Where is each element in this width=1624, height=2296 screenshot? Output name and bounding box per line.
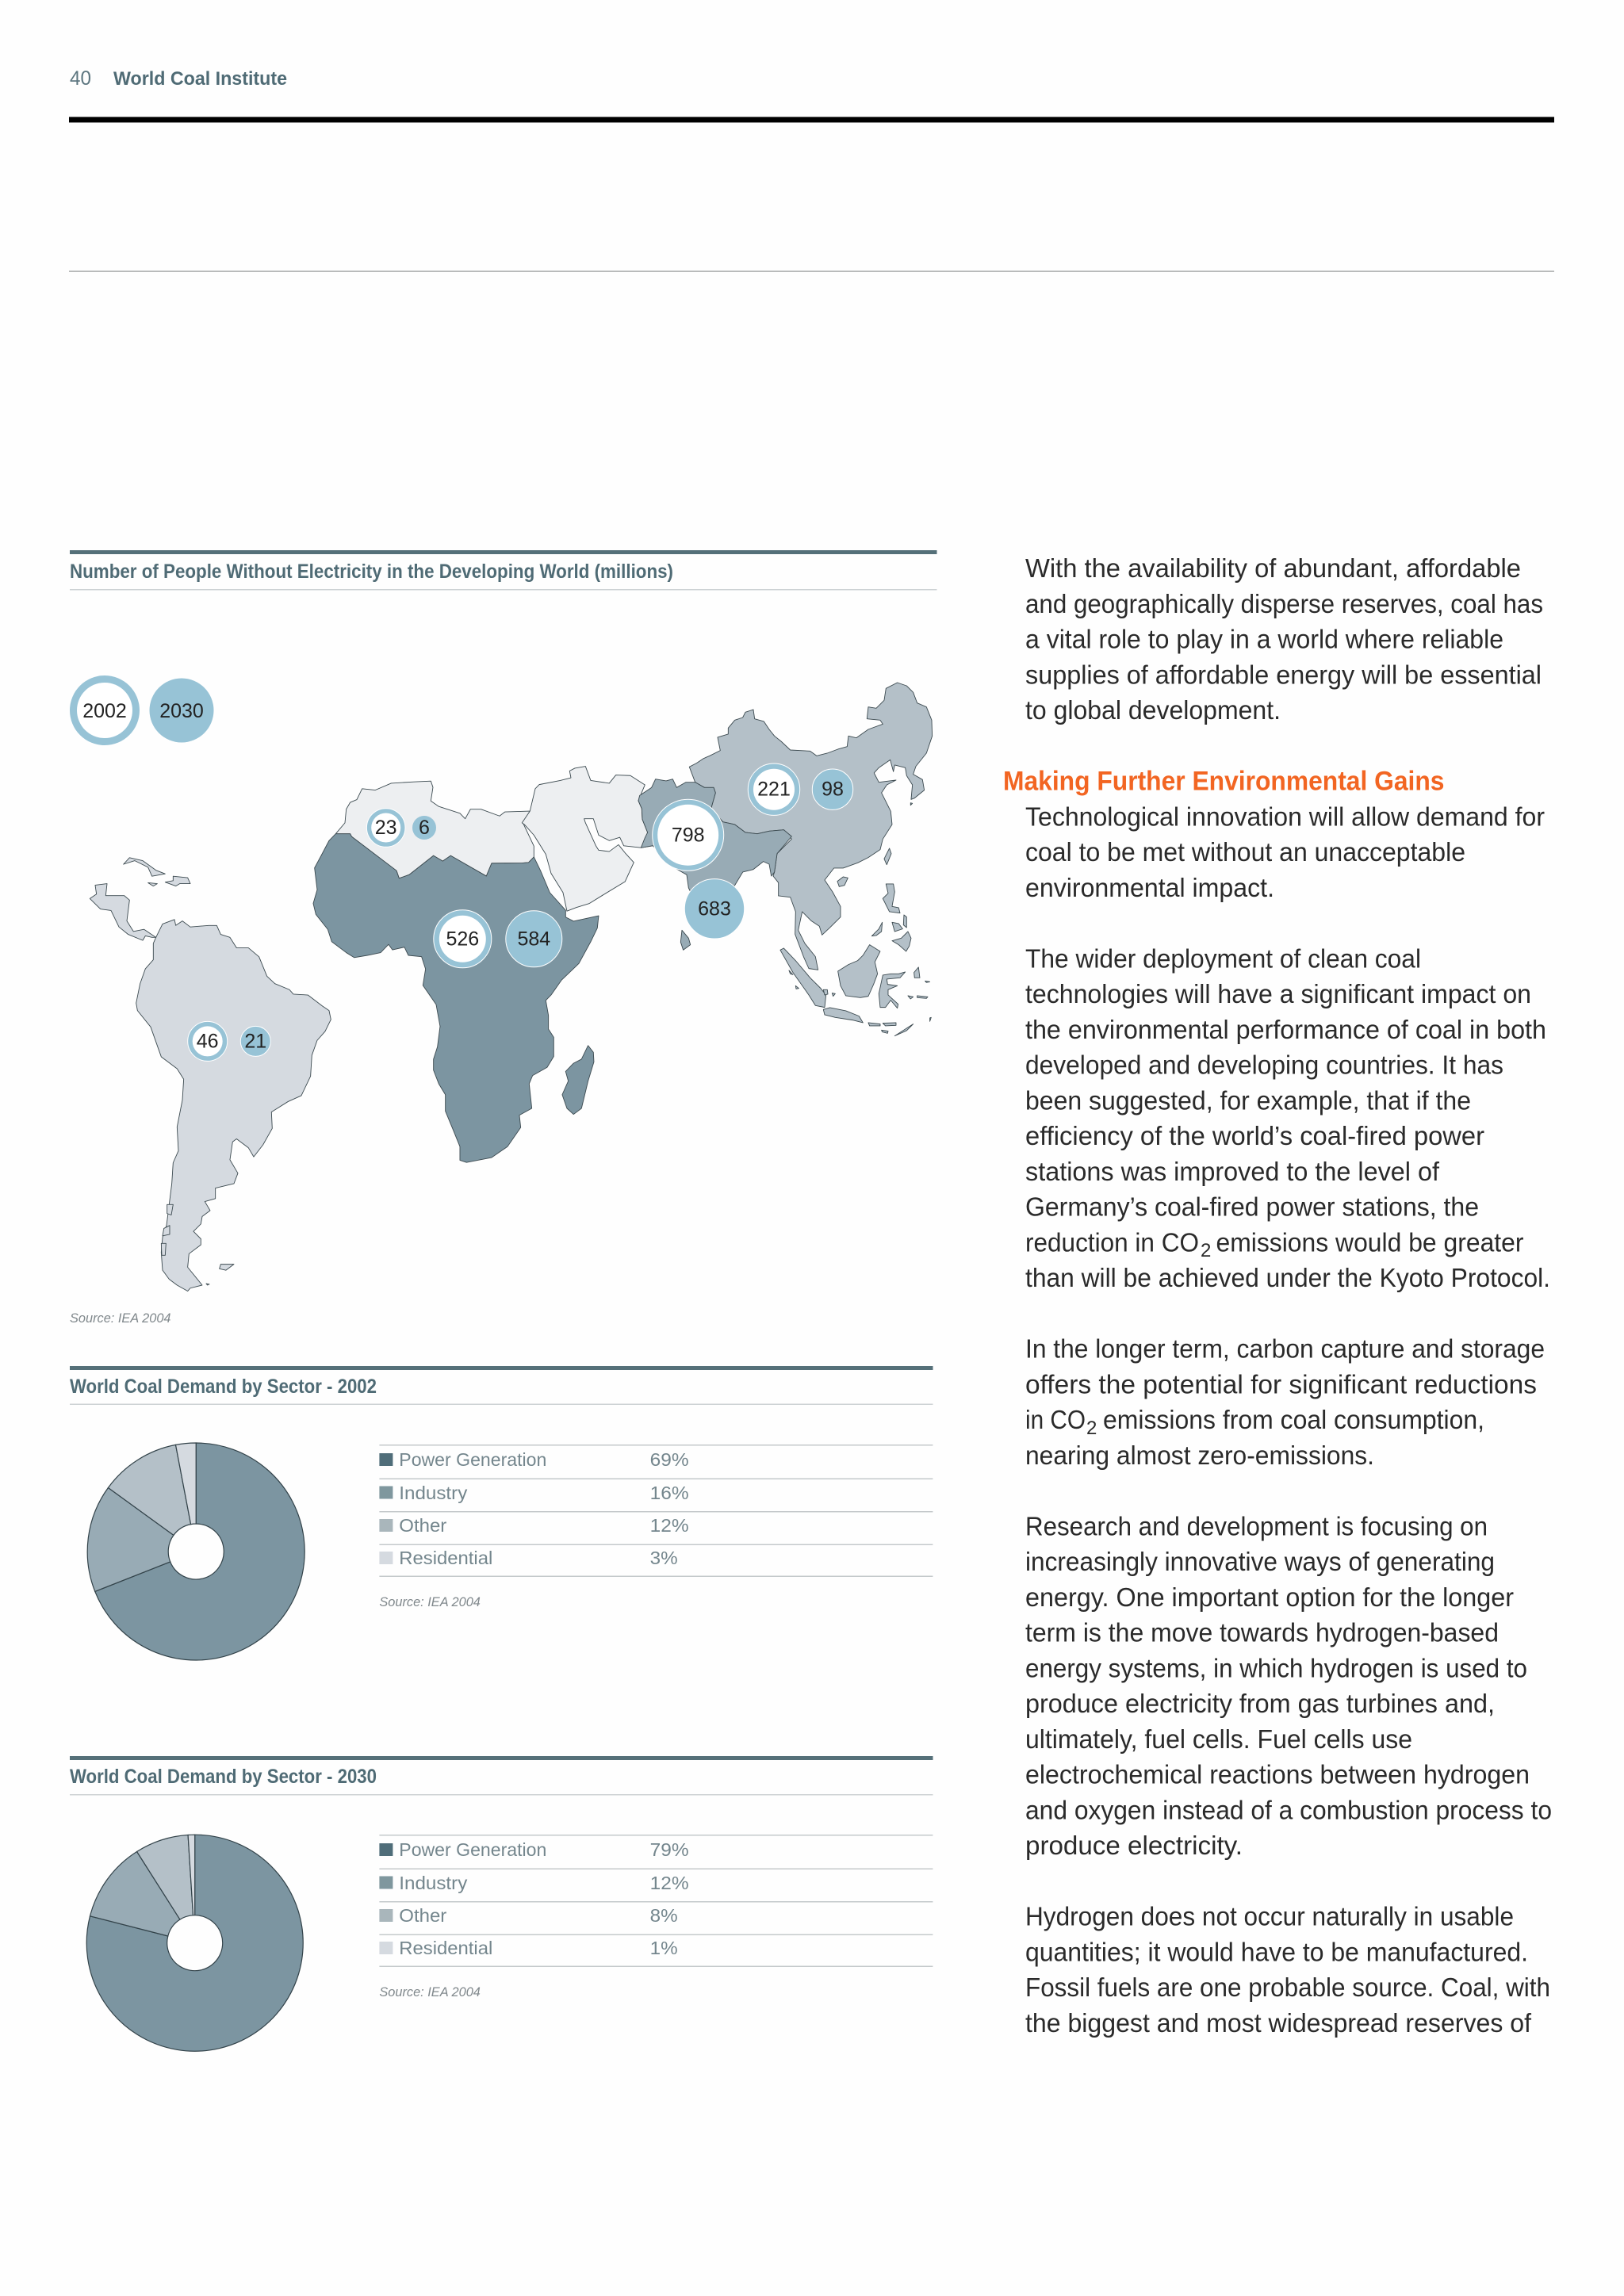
- page header: World Coal Institute: [113, 68, 287, 90]
- table 2030: Other: [399, 1905, 447, 1926]
- paragraph: technological innovation: Technological innovation will allow demand for: [1025, 802, 1545, 831]
- paragraph: clean coal technologies: technologies will have a significant impact on: [1025, 979, 1531, 1008]
- heading 2002: World Coal Demand by Sector - 2002: [70, 1376, 377, 1398]
- heading 2002: [70, 1366, 933, 1405]
- table 2030: Residential: [399, 1938, 492, 1958]
- paragraph: research and development: increasingly innovative ways of generating: [1025, 1547, 1495, 1576]
- bubbles: East Asia: 98: [822, 779, 844, 801]
- paragraph: clean coal technologies: developed and developing countries. It has: [1025, 1050, 1503, 1080]
- donut chart 2002: [87, 1443, 304, 1660]
- paragraph: hydrogen: Hydrogen does not occur naturally in usable: [1025, 1901, 1514, 1931]
- section heading: Making Further Environmental Gains: [1003, 766, 1445, 796]
- intro paragraph: to global development.: [1025, 695, 1281, 725]
- table 2030: 79%: [650, 1839, 689, 1860]
- intro paragraph: With the availability of abundant, affordable: [1025, 553, 1521, 583]
- panel: coal demand 2030: [70, 1756, 933, 2051]
- table 2002: Power Generation: [399, 1449, 546, 1470]
- bubbles: North Africa: 6: [419, 817, 430, 839]
- bubbles: South America: [188, 1021, 270, 1061]
- paragraph: research and development: produce electricity.: [1025, 1831, 1243, 1860]
- bubbles: Africa: 526: [446, 928, 479, 950]
- paragraph: hydrogen: quantities; it would have to be manufactured.: [1025, 1937, 1528, 1966]
- paragraph: research and development: electrochemical reactions between hydrogen: [1025, 1760, 1530, 1789]
- bubbles: South Asia: 798: [672, 824, 705, 846]
- page header: 40: [70, 67, 91, 90]
- paragraph: carbon capture: offers the potential for significant reductions: [1025, 1369, 1537, 1399]
- paragraph: research and development: ultimately, fuel cells. Fuel cells use: [1025, 1724, 1412, 1754]
- page header: [69, 67, 1554, 122]
- map: South America and Caribbean: [90, 858, 331, 1292]
- bubbles: South Asia: 683: [698, 897, 731, 920]
- paragraph: technological innovation: environmental impact.: [1025, 873, 1274, 902]
- heading 2030: World Coal Demand by Sector - 2030: [70, 1766, 377, 1788]
- paragraph: hydrogen: Fossil fuels are one probable source. Coal, with: [1025, 1973, 1550, 2002]
- bubbles: Africa: 584: [517, 928, 550, 950]
- bubbles: South Asia: [653, 799, 745, 939]
- paragraph: clean coal technologies: The wider deployment of clean coal: [1025, 943, 1421, 973]
- bubbles: East Asia: 221: [757, 779, 791, 801]
- table 2030: 8%: [650, 1905, 678, 1926]
- table 2002: Industry: [399, 1483, 468, 1503]
- paragraph: hydrogen: [1025, 1901, 1550, 2038]
- paragraph: clean coal technologies: reduction in CO: [1025, 1227, 1199, 1257]
- bubbles: Africa: [434, 910, 562, 968]
- paragraph: carbon capture: In the longer term, carbon capture and storage: [1025, 1334, 1545, 1364]
- bubbles: North Africa: 23: [375, 817, 397, 839]
- paragraph: research and development: energy. One important option for the longer: [1025, 1582, 1514, 1612]
- paragraph: clean coal technologies: than will be achieved under the Kyoto Protocol.: [1025, 1263, 1550, 1292]
- table 2002: 69%: [650, 1449, 689, 1470]
- paragraph: clean coal technologies: emissions would be greater: [1216, 1227, 1524, 1257]
- paragraph: clean coal technologies: been suggested, for example, that if the: [1025, 1085, 1471, 1115]
- donut chart 2030: [86, 1835, 303, 2051]
- legend: [70, 675, 214, 745]
- paragraph: technological innovation: coal to be met without an unacceptable: [1025, 837, 1465, 867]
- heading 2030: [70, 1756, 933, 1795]
- paragraph: clean coal technologies: efficiency of the world’s coal-fired power: [1025, 1121, 1484, 1150]
- paragraph: clean coal technologies: [1025, 943, 1550, 1292]
- source 2002: Source: IEA 2004: [379, 1594, 481, 1609]
- intro paragraph: a vital role to play in a world where reliable: [1025, 625, 1503, 653]
- paragraph: clean coal technologies: 2: [1201, 1240, 1211, 1261]
- paragraph: research and development: [1025, 1511, 1552, 1860]
- table 2030: 12%: [650, 1873, 689, 1893]
- bubbles: North Africa: [366, 809, 436, 847]
- table 2002: 16%: [650, 1483, 689, 1503]
- paragraph: research and development: term is the move towards hydrogen-based: [1025, 1617, 1499, 1647]
- bubbles: South America: 46: [197, 1030, 219, 1052]
- table 2002: 12%: [650, 1515, 689, 1536]
- body text column: [1003, 553, 1552, 2038]
- paragraph: carbon capture: in CO: [1025, 1405, 1086, 1434]
- map heading: [70, 550, 937, 590]
- paragraph: carbon capture: 2: [1086, 1418, 1097, 1439]
- table 2002: Other: [399, 1515, 447, 1536]
- table 2030: Power Generation: [399, 1839, 546, 1860]
- paragraph: research and development: and oxygen instead of a combustion process to: [1025, 1795, 1552, 1824]
- paragraph: clean coal technologies: Germany’s coal-fired power stations, the: [1025, 1192, 1479, 1221]
- legend: 2002: [82, 700, 127, 722]
- paragraph: clean coal technologies: the environmental performance of coal in both: [1025, 1015, 1546, 1044]
- paragraph: research and development: energy systems, in which hydrogen is used to: [1025, 1653, 1527, 1682]
- table 2002: 3%: [650, 1548, 678, 1568]
- map heading: Number of People Without Electricity in the Developing World (millions): [70, 561, 673, 583]
- paragraph: technological innovation: [1025, 802, 1545, 902]
- table 2030: 1%: [650, 1938, 678, 1958]
- paragraph: carbon capture: nearing almost zero-emissions.: [1025, 1441, 1374, 1470]
- bubbles: South America: 21: [244, 1030, 266, 1052]
- paragraph: research and development: Research and development is focusing on: [1025, 1511, 1488, 1540]
- intro paragraph: supplies of affordable energy will be essential: [1025, 660, 1542, 689]
- table 2002: Residential: [399, 1548, 492, 1568]
- paragraph: clean coal technologies: stations was improved to the level of: [1025, 1157, 1440, 1186]
- table 2030: Industry: [399, 1873, 468, 1893]
- intro paragraph: [1025, 553, 1543, 725]
- map: Africa and Middle East: [313, 767, 653, 1162]
- table 2030: [379, 1835, 933, 1967]
- map: South and East Asia: [638, 683, 933, 1036]
- source 2030: Source: IEA 2004: [379, 1984, 481, 1999]
- paragraph: carbon capture: [1025, 1334, 1545, 1470]
- map source: Source: IEA 2004: [70, 1311, 171, 1326]
- panel: people without electricity map: [70, 550, 937, 1326]
- bubbles: East Asia: [748, 763, 853, 815]
- paragraph: carbon capture: emissions from coal consumption,: [1103, 1405, 1484, 1434]
- table 2002: [379, 1445, 933, 1577]
- paragraph: hydrogen: the biggest and most widespread reserves of: [1025, 2008, 1532, 2038]
- panel: coal demand 2002: [70, 1366, 933, 1660]
- legend: 2030: [159, 700, 204, 722]
- intro paragraph: and geographically disperse reserves, coal has: [1025, 589, 1543, 618]
- paragraph: research and development: produce electricity from gas turbines and,: [1025, 1689, 1495, 1718]
